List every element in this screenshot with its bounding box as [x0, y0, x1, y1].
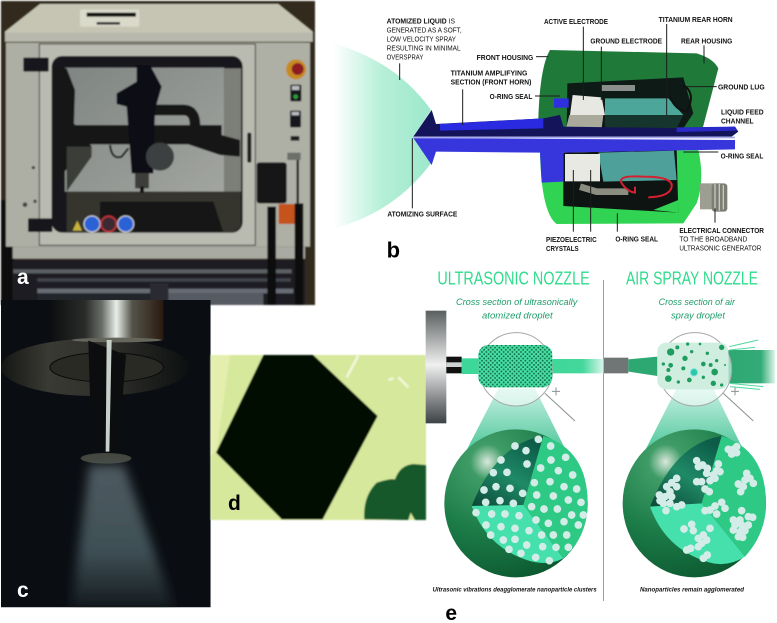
callouts: TITANIUM REAR HORN [659, 16, 733, 24]
lower housing [540, 150, 701, 224]
panel a: coating machine photo [1, 1, 315, 305]
spray plume [72, 453, 173, 607]
callouts [387, 16, 765, 253]
electrical connector [700, 183, 727, 212]
callouts: CRYSTALS [546, 245, 579, 253]
subtitle: air spray: Cross section of air [659, 297, 736, 307]
divider [603, 280, 604, 601]
subtitle: air spray [659, 297, 736, 320]
callouts: LOW VELOCITY SPRAY [387, 36, 456, 44]
callouts: PIEZOELECTRIC [546, 236, 597, 244]
callouts: O-RING SEAL [721, 153, 764, 161]
callouts: TO THE BROADBAND [679, 236, 747, 244]
subtitle: ultrasonic: atomized droplet [482, 310, 553, 320]
droplet sphere: ultrasonic [444, 429, 588, 577]
control panel [257, 44, 308, 246]
lower inner cavity [563, 150, 678, 213]
caption: ultrasonic: Ultrasonic vibrations deagglomerate nanoparticle clusters [433, 588, 597, 594]
panel e: nozzle comparison [426, 280, 775, 623]
callouts: FRONT HOUSING [477, 54, 534, 62]
callouts: O-RING SEAL [490, 93, 533, 101]
air spray nozzle [604, 340, 775, 389]
heading: ultrasonic nozzle: ULTRASONIC NOZZLE [437, 267, 590, 288]
door handle [247, 133, 251, 163]
label d: d [228, 492, 241, 515]
callouts: ATOMIZING SURFACE [387, 211, 458, 219]
callouts: GROUND LUG [718, 84, 765, 92]
front horn [413, 98, 738, 183]
panel c: nozzle spray photo [1, 300, 211, 607]
callouts: OVERSPRAY [387, 53, 424, 61]
callouts: REAR HOUSING [681, 38, 733, 46]
callouts: SECTION (FRONT HORN) [451, 78, 532, 86]
upper housing [538, 50, 718, 128]
callouts: RESULTING IN MINIMAL [387, 44, 461, 52]
nozzle cylinder [52, 300, 163, 341]
black film [216, 355, 378, 519]
upper inner cavity [566, 77, 693, 128]
label a: a [17, 266, 29, 289]
machine body and door [6, 43, 310, 247]
subtitle: ultrasonic [456, 297, 578, 320]
magnifier: ultrasonic [467, 333, 575, 450]
machine window and gantry [52, 56, 243, 233]
caption: air spray: Nanoparticles remain agglomerated [640, 588, 744, 594]
safety signs [73, 216, 134, 232]
subtitle: ultrasonic: Cross section of ultrasonically [456, 297, 578, 307]
callouts: GENERATED AS A SOFT, [387, 27, 462, 35]
atomized spray [333, 43, 431, 228]
machine roof [5, 4, 313, 42]
callouts: LIQUID FEED [721, 108, 764, 116]
pendant cables [272, 160, 299, 305]
panel b: ultrasonic nozzle cross-section [333, 16, 765, 288]
callouts: O-RING SEAL [615, 236, 659, 244]
label b: b [387, 237, 400, 262]
nozzle disk [1, 338, 189, 396]
nozzle stem [88, 340, 126, 453]
callouts: GROUND ELECTRODE [590, 38, 662, 46]
subtitle: air spray: spray droplet [671, 310, 726, 320]
callouts: CHANNEL [721, 117, 754, 125]
callouts: ACTIVE ELECTRODE [544, 18, 608, 26]
machine base and frame [13, 247, 305, 305]
callouts: ELECTRICAL CONNECTOR [679, 227, 765, 235]
label c: c [17, 579, 29, 602]
leader lines [400, 24, 718, 232]
droplet sphere: air spray [623, 429, 766, 577]
gloved fingers [364, 464, 426, 520]
glare streaks [347, 356, 408, 387]
callouts: ATOMIZED LIQUID IS [387, 17, 455, 25]
panel d: coated film photo [211, 355, 426, 520]
callouts: TITANIUM AMPLIFYING [451, 69, 528, 77]
callouts: ULTRASONIC GENERATOR [679, 245, 761, 253]
magnifier: air spray [645, 333, 753, 450]
ultrasonic nozzle head [426, 311, 603, 423]
